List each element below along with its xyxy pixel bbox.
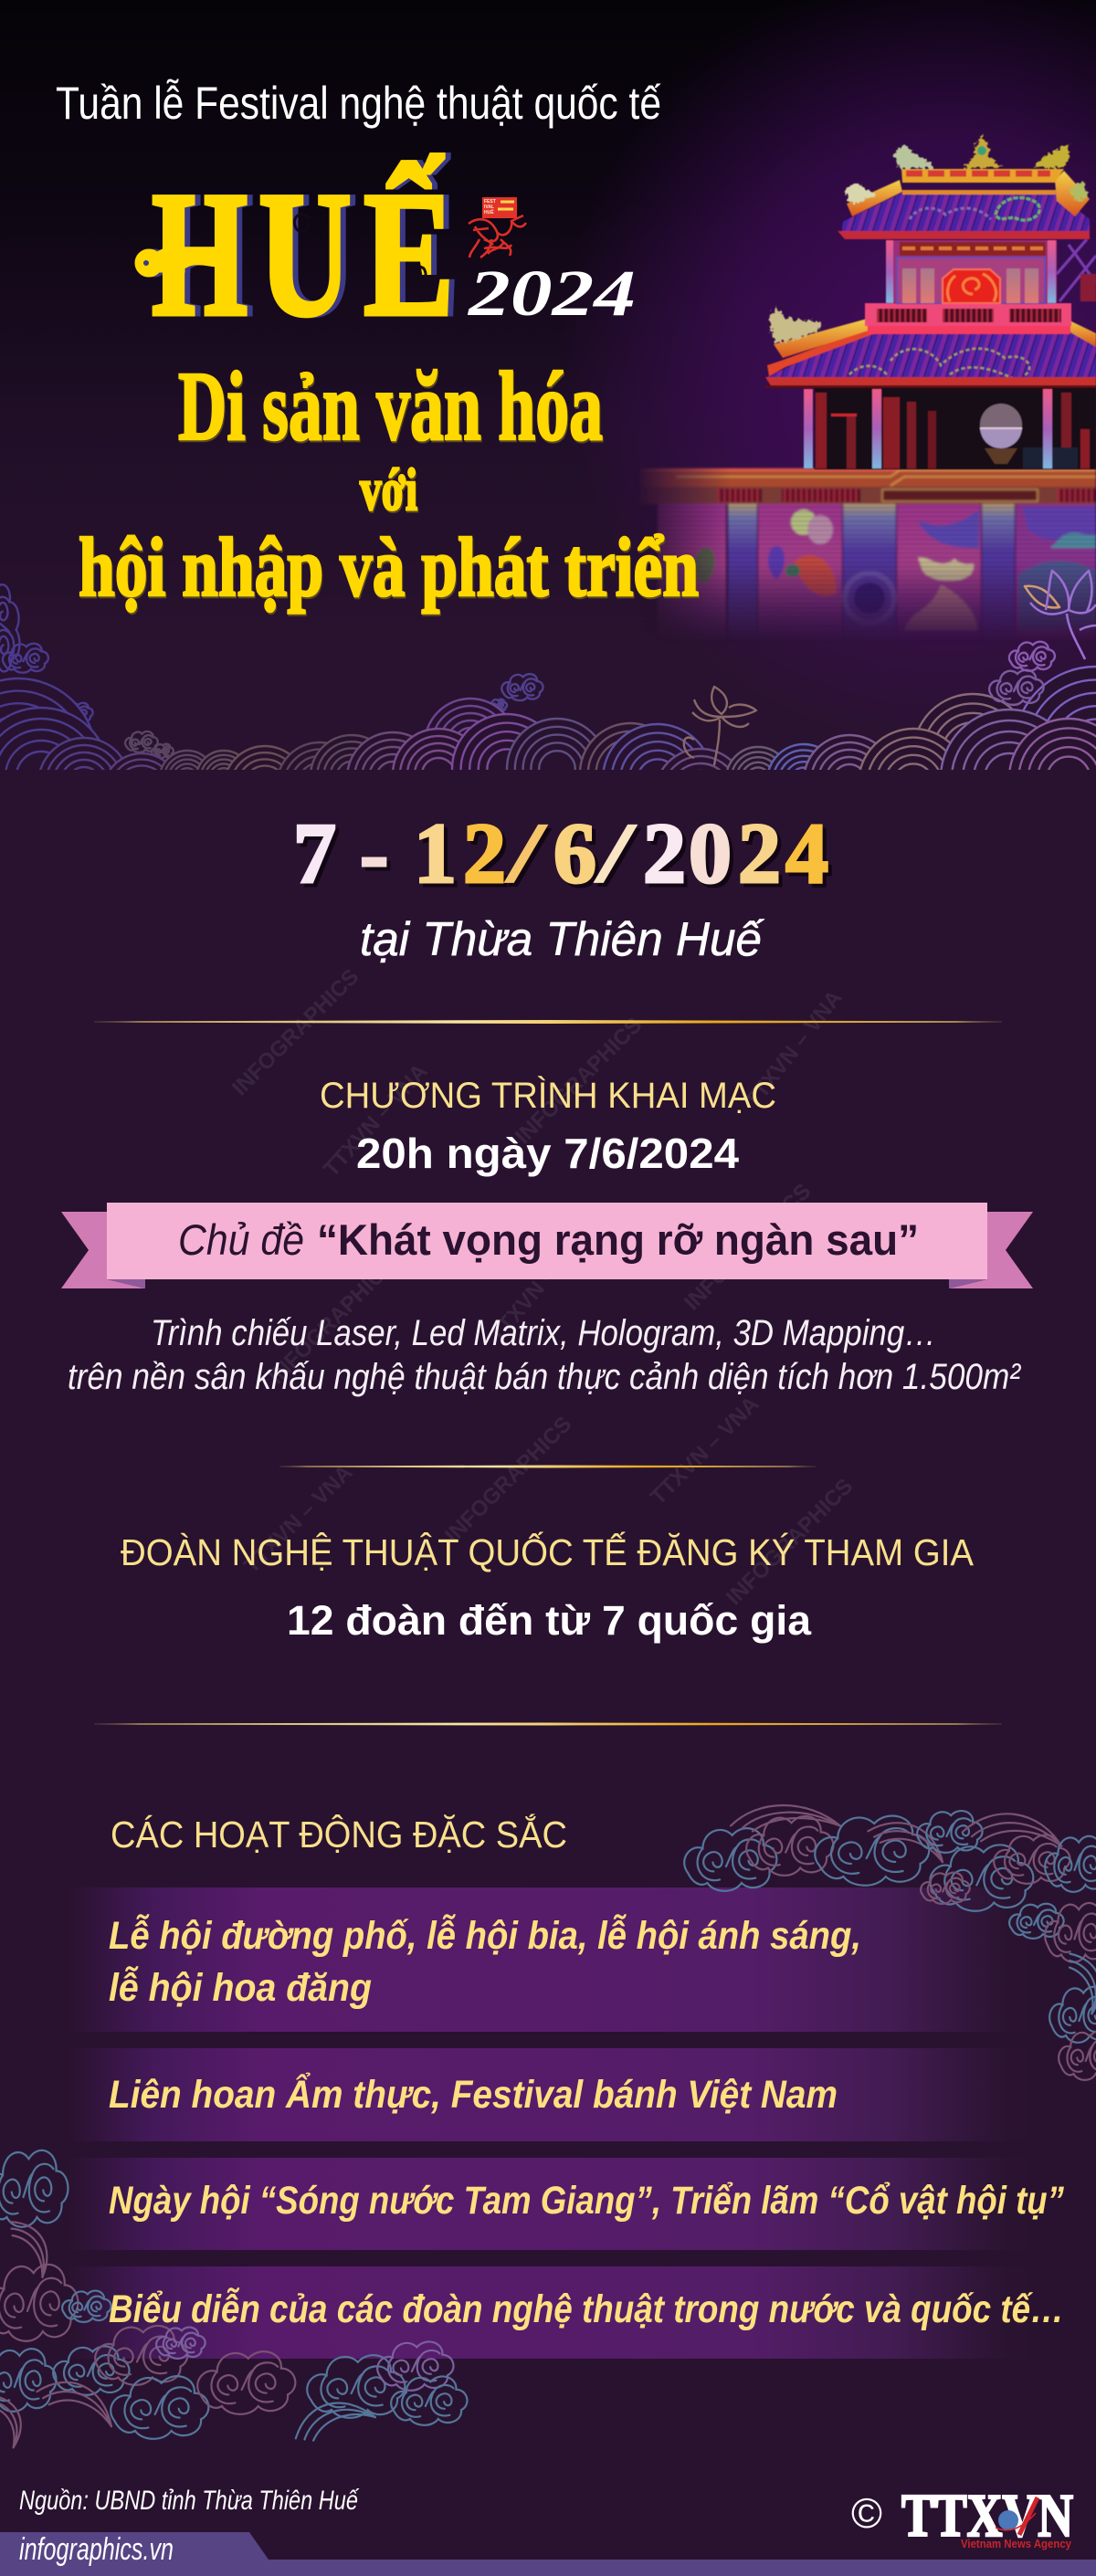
opening time: 20h ngày 7/6/2024 xyxy=(356,1130,739,1177)
copyright and TTXVN logo: Vietnam News Agency xyxy=(961,2537,1072,2550)
title: year 2024: 2024 xyxy=(468,257,636,330)
cloud ornament: bottom left xyxy=(0,2150,467,2449)
left clouds xyxy=(0,584,543,758)
red spiral panel xyxy=(943,269,1000,303)
watermarks: TTXVN – VNA xyxy=(485,1223,595,1348)
watermarks: INFOGRAPHICS xyxy=(264,1253,400,1389)
watermarks: INFOGRAPHICS xyxy=(227,964,364,1100)
watermarks: TTXVN – VNA xyxy=(646,1392,764,1509)
copyright and TTXVN logo xyxy=(851,2482,1073,2550)
roof-corner dragon xyxy=(769,306,820,342)
title: festival week: Tuần lễ Festival nghệ thuật quốc tế xyxy=(56,78,661,129)
date heading: 1 xyxy=(414,806,457,901)
upper roof xyxy=(838,134,1090,239)
heading: theme lines: với xyxy=(360,457,417,523)
date heading: 6 xyxy=(553,806,596,901)
heading: theme lines: Di sản văn hóa xyxy=(178,352,603,461)
icon: purple lotus xyxy=(1025,571,1096,659)
footer band xyxy=(0,2532,1096,2576)
opening description xyxy=(68,1313,1021,1397)
watermarks xyxy=(227,964,858,1610)
watermarks: INFOGRAPHICS xyxy=(511,1013,647,1149)
heading: theme lines: hội nhập và phát triển xyxy=(79,520,699,614)
photo: Huế palace pavilion xyxy=(639,134,1096,641)
icon: bronze lotus xyxy=(684,687,756,765)
activity text list: Lễ hội đường phố, lễ hội bia, lễ hội ánh sáng, xyxy=(109,1913,861,1958)
watermarks: TTXVN – VNA xyxy=(319,1059,433,1182)
heading: theme lines xyxy=(79,352,699,614)
ground floor columns and interior xyxy=(804,387,1096,469)
activity text list: Liên hoan Ẩm thực, Festival bánh Việt Nam xyxy=(109,2072,838,2117)
balcony xyxy=(865,303,1071,334)
date heading: 2 xyxy=(463,806,506,901)
watermarks: INFOGRAPHICS xyxy=(440,1412,576,1548)
icon: Festival Huế dragon logo: FEST xyxy=(484,199,496,205)
heading: international troupes: ĐOÀN NGHỆ THUẬT QUỐC TẾ ĐĂNG KÝ THAM GIA xyxy=(121,1531,975,1573)
opening description: Trình chiếu Laser, Led Matrix, Hologram, 3D Mapping… xyxy=(151,1313,936,1353)
roof ridge ornaments xyxy=(893,144,933,168)
title: HUẾ wordmark: U xyxy=(258,155,352,352)
icon: Festival Huế dragon logo: HUẾ xyxy=(484,209,494,216)
title: HUẾ wordmark: H xyxy=(152,156,248,353)
temple drum xyxy=(980,404,1022,464)
activity bars xyxy=(68,1887,1037,2359)
lower roof xyxy=(765,306,1096,388)
watermarks: INFOGRAPHICS xyxy=(680,1179,816,1315)
activity text list: lễ hội hoa đăng xyxy=(109,1965,372,2010)
cloud ornament: top right xyxy=(684,1805,1096,2080)
heading: activities: CÁC HOẠT ĐỘNG ĐẶC SẮC xyxy=(111,1814,567,1856)
decorative wave band xyxy=(0,584,1096,846)
ribbon banner: theme: “Khát vọng rạng rỡ ngàn sau” xyxy=(317,1215,919,1264)
date heading: - xyxy=(360,806,388,901)
source: Nguồn: UBND tỉnh Thừa Thiên Huế xyxy=(19,2486,360,2516)
title: HUẾ wordmark: Ế xyxy=(364,154,454,353)
ribbon banner: theme: Chủ đề xyxy=(178,1215,304,1264)
copyright and TTXVN logo: © xyxy=(851,2489,882,2537)
icon: Festival Huế dragon logo xyxy=(469,197,526,258)
title: HUẾ wordmark xyxy=(137,154,454,353)
location: tại Thừa Thiên Huế xyxy=(360,913,764,966)
pavilion base wall with paintings xyxy=(639,468,1096,641)
date heading xyxy=(293,804,828,901)
date heading: 2 xyxy=(643,806,686,901)
date heading: 7 xyxy=(293,806,336,901)
date heading: 0 xyxy=(689,806,732,901)
heading: opening programme: CHƯƠNG TRÌNH KHAI MẠC xyxy=(320,1075,776,1116)
ribbon banner: theme xyxy=(61,1203,1033,1288)
activity text list xyxy=(109,1913,1064,2331)
watermarks: TTXVN – VNA xyxy=(239,1460,357,1578)
troupes count: 12 đoàn đến từ 7 quốc gia xyxy=(287,1597,812,1644)
date heading: / xyxy=(593,804,638,901)
date heading: 4 xyxy=(785,806,828,901)
upper storey xyxy=(886,239,1096,303)
watermarks: TTXVN – VNA xyxy=(740,986,848,1113)
date heading: / xyxy=(503,804,549,901)
watermarks: INFOGRAPHICS xyxy=(722,1474,858,1610)
header background xyxy=(0,0,1096,749)
waves xyxy=(0,678,92,729)
website: infographics.vn xyxy=(19,2532,174,2567)
icon: Festival Huế dragon logo: IVAL xyxy=(484,205,494,210)
date heading: 2 xyxy=(738,806,781,901)
